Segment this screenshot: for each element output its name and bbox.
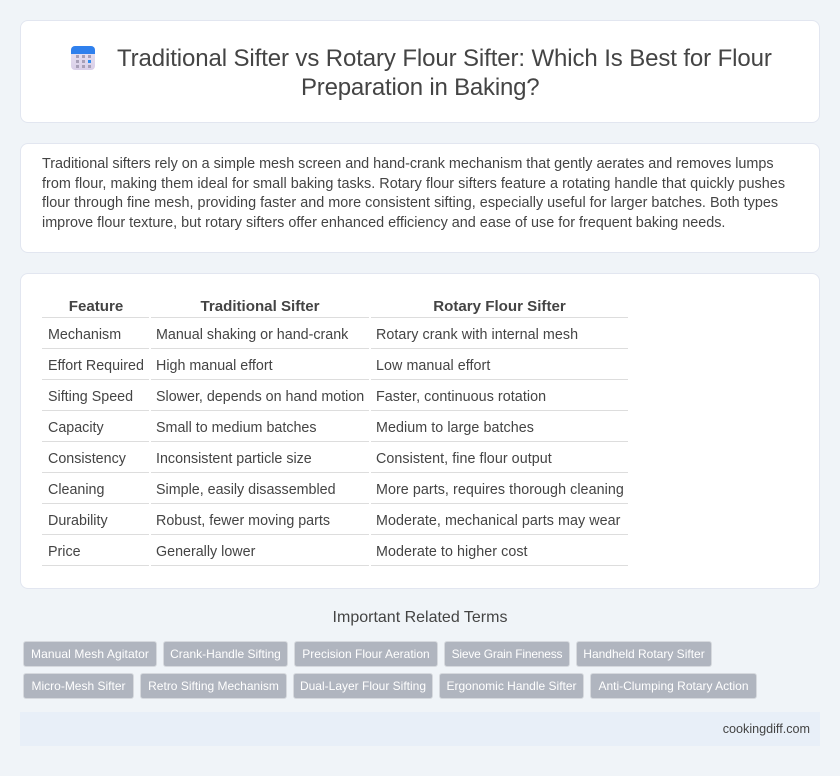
comparison table: Medium to large batches <box>376 420 534 436</box>
text block: summary: from flour, making them ideal for small baking tasks. Rotary flour sifters feature a rotating handle that quickly pushes <box>42 176 785 192</box>
comparison table: More parts, requires thorough cleaning <box>376 482 624 498</box>
related term tags: Handheld Rotary Sifter <box>583 647 705 661</box>
table header row: Rotary Flour Sifter <box>433 298 566 315</box>
title <box>117 45 772 101</box>
comparison table: Consistency <box>48 451 126 467</box>
comparison table: Consistent, fine flour output <box>376 451 552 467</box>
comparison table: High manual effort <box>156 358 273 374</box>
comparison table: Small to medium batches <box>156 420 317 436</box>
title: Preparation in Baking? <box>301 74 539 101</box>
text block: summary: flour through fine mesh, providing faster and more consistent sifting, especially useful for larger batches. Both types <box>42 195 778 211</box>
comparison table <box>42 298 628 566</box>
comparison table: Simple, easily disassembled <box>156 482 336 498</box>
comparison table: Durability <box>48 513 108 529</box>
comparison table: Inconsistent particle size <box>156 451 312 467</box>
related term tags: Crank-Handle Sifting <box>170 647 281 661</box>
table header row <box>69 298 566 315</box>
comparison table: Mechanism <box>48 327 121 343</box>
comparison table: Cleaning <box>48 482 104 498</box>
comparison table: Generally lower <box>156 544 255 560</box>
related term tags: Sieve Grain Fineness <box>452 647 562 661</box>
comparison table: Moderate, mechanical parts may wear <box>376 513 620 529</box>
panel: comparison card <box>20 273 820 589</box>
comparison table: Faster, continuous rotation <box>376 389 546 405</box>
title: Traditional Sifter vs Rotary Flour Sifter: Which Is Best for Flour <box>117 45 772 72</box>
related term tags: Micro-Mesh Sifter <box>31 679 126 693</box>
related term tags: Dual-Layer Flour Sifting <box>300 679 426 693</box>
comparison table: Low manual effort <box>376 358 490 374</box>
table header row: Traditional Sifter <box>200 298 320 315</box>
text block: summary <box>42 156 785 230</box>
related term tags: Anti-Clumping Rotary Action <box>598 679 749 693</box>
heading: related terms: Important Related Terms <box>333 609 507 626</box>
related term tags: Manual Mesh Agitator <box>31 647 149 661</box>
related term tags: Retro Sifting Mechanism <box>148 679 279 693</box>
icon: calendar grid <box>71 46 95 70</box>
comparison table: Moderate to higher cost <box>376 544 528 560</box>
comparison table: Capacity <box>48 420 104 436</box>
comparison table: Price <box>48 544 81 560</box>
comparison table: Robust, fewer moving parts <box>156 513 330 529</box>
comparison table: Slower, depends on hand motion <box>156 389 364 405</box>
table header row: Feature <box>69 298 123 315</box>
related term tags: Ergonomic Handle Sifter <box>446 679 577 693</box>
related term tags <box>23 641 757 699</box>
panel: title card <box>20 20 820 123</box>
footer bar <box>20 712 820 746</box>
comparison table: Manual shaking or hand-crank <box>156 327 348 343</box>
comparison table: Sifting Speed <box>48 389 133 405</box>
related term tags: Precision Flour Aeration <box>302 647 430 661</box>
comparison table: Effort Required <box>48 358 144 374</box>
comparison table: Rotary crank with internal mesh <box>376 327 578 343</box>
footer credit: cookingdiff.com <box>723 722 810 736</box>
text block: summary: improve flour texture, but rotary sifters offer enhanced efficiency and ease of use for frequent baking needs. <box>42 214 725 230</box>
panel: summary card <box>20 143 820 253</box>
text block: summary: Traditional sifters rely on a simple mesh screen and hand-crank mechanism that gently aerates and removes lumps <box>42 156 774 172</box>
